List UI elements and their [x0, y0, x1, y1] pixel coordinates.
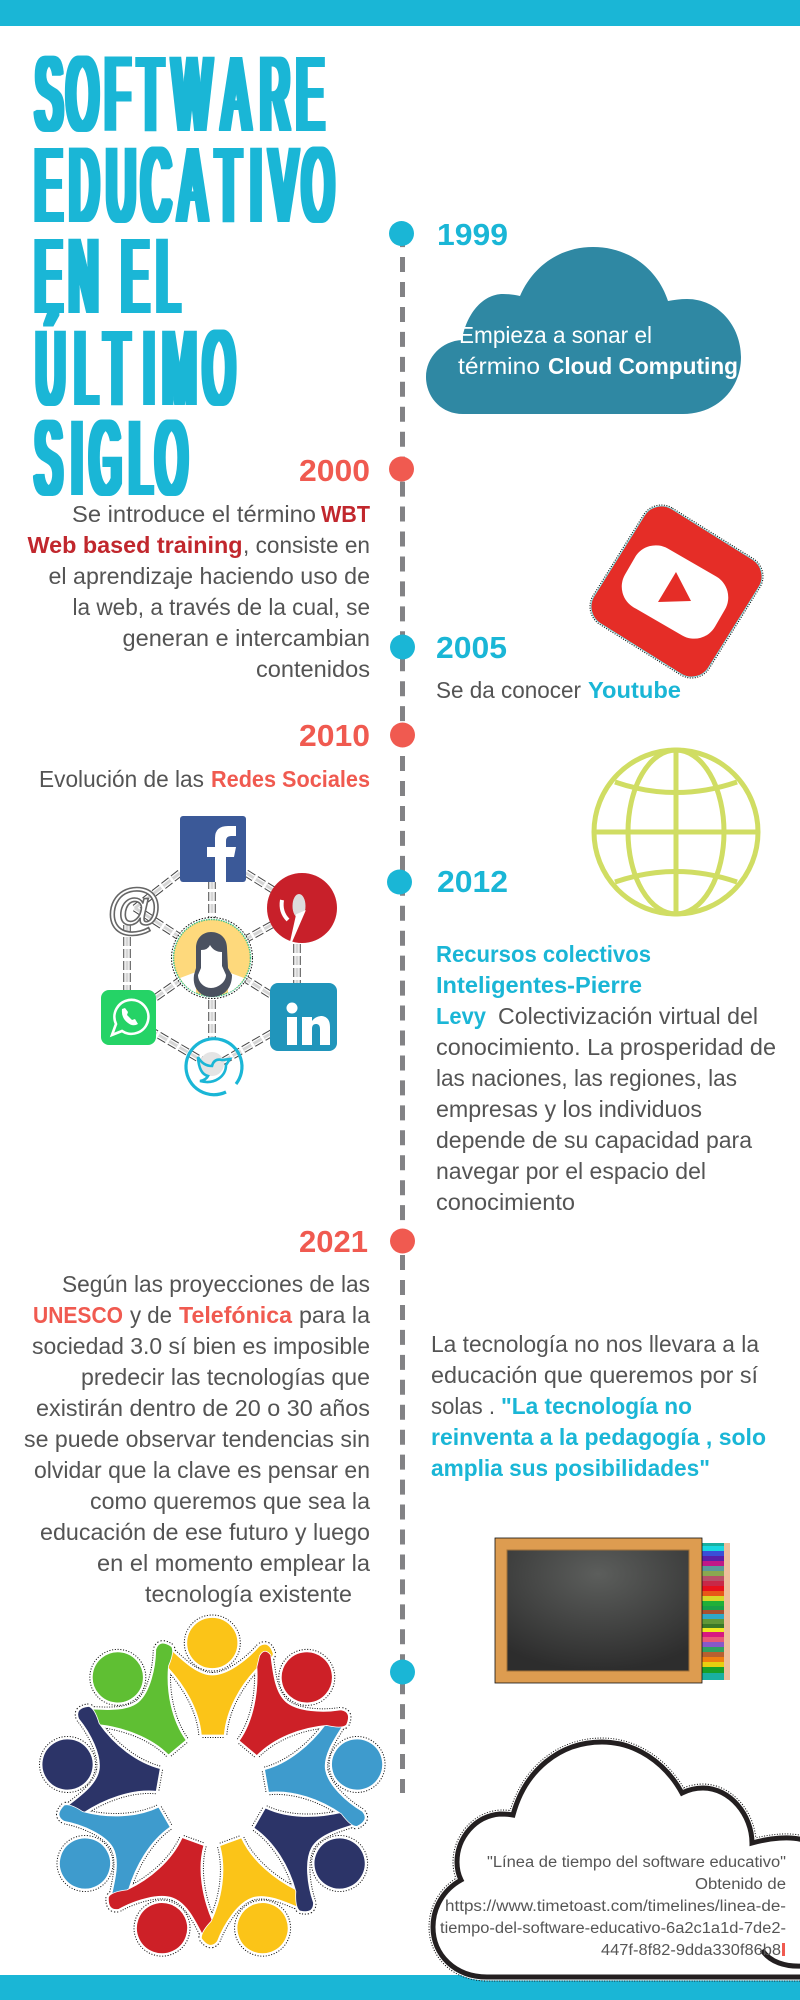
text block 2012: Inteligentes-Pierre [436, 972, 642, 998]
timeline dashed line [400, 232, 405, 1793]
citation text [440, 1854, 786, 1959]
text 2005 [436, 677, 681, 703]
text block 2000: contenidos [256, 656, 370, 682]
text block 2021: Según las proyecciones de las [62, 1271, 370, 1297]
text block 2012: navegar por el espacio del [436, 1158, 706, 1184]
cloud text: Empieza a sonar el [459, 322, 652, 348]
outlined cloud [433, 1742, 800, 1977]
text block 2000: , consiste en [243, 532, 370, 558]
text block 2012: las naciones, las regiones, las [436, 1065, 737, 1091]
quote block: "La tecnología no [501, 1393, 692, 1419]
text block 2021: Telefónica [179, 1302, 292, 1328]
text block 2012: Levy [436, 1003, 486, 1029]
text block 2021: para la [299, 1302, 370, 1328]
title: EDUCATIVO [35, 126, 333, 243]
icon: globe [594, 750, 758, 914]
text block 2012: conocimiento. La prosperidad de [436, 1034, 776, 1060]
text 2010: Evolución de las [39, 766, 204, 792]
quote block [431, 1331, 766, 1481]
title: SOFTWARE [36, 35, 323, 152]
year 2012: 2012 [437, 864, 508, 899]
cloud text: término [458, 353, 540, 379]
text block 2021: tecnología existente [145, 1581, 352, 1607]
timeline dot 2010 [390, 722, 415, 748]
title: ÚLTIMO [36, 309, 235, 426]
icon: youtube [582, 497, 771, 686]
quote block: educación que queremos por sí [431, 1362, 759, 1388]
board frame [495, 1538, 702, 1683]
timeline dot 2021 [390, 1228, 415, 1254]
icon: whatsapp [101, 990, 156, 1045]
figures [32, 1618, 393, 1973]
text block 2012: Colectivización virtual del [498, 1003, 758, 1029]
timeline dot 1999 [389, 221, 414, 246]
citation text: https://www.timetoast.com/timelines/linea-de- [445, 1898, 786, 1915]
team circle illustration [32, 1618, 393, 1973]
top band [0, 0, 800, 26]
title: SIGLO [35, 399, 187, 516]
timeline dot 2000 [389, 456, 414, 482]
text 2010 [39, 766, 370, 792]
timeline dot 2012 [387, 870, 412, 894]
text block 2000: Se introduce el término [72, 501, 316, 527]
citation text: tiempo-del-software-educativo-6a2c1a1d-7de2- [440, 1920, 786, 1937]
icon: linkedin [270, 983, 337, 1051]
citation text: "Línea de tiempo del software educativo" [487, 1854, 786, 1871]
title: EN EL [35, 217, 179, 334]
icon: blackboard with pencils [495, 1538, 730, 1683]
text block 2021 [24, 1271, 370, 1607]
text block 2021: en el momento emplear la [97, 1550, 370, 1576]
text block 2021: existirán dentro de 20 o 30 años [36, 1395, 370, 1421]
cloud text [458, 322, 738, 379]
year 2021: 2021 [299, 1224, 368, 1259]
text block 2021: educación de ese futuro y luego [40, 1519, 370, 1545]
citation text: Obtenido de [695, 1876, 786, 1893]
cloud shape [426, 247, 741, 414]
cloud text: Cloud Computing [548, 353, 738, 379]
board surface [507, 1550, 689, 1671]
year 1999: 1999 [437, 217, 508, 252]
text 2010: Redes Sociales [211, 766, 370, 792]
timeline dot 2005 [390, 634, 415, 660]
text 2005: Se da conocer [436, 677, 581, 703]
text 2005: Youtube [588, 677, 681, 703]
year 2000: 2000 [299, 453, 370, 488]
social network diagram [101, 816, 337, 1095]
outline halo [32, 1618, 393, 1973]
text block 2012: Recursos colectivos [436, 941, 651, 967]
year 2005: 2005 [436, 630, 507, 665]
text block 2021: predecir las tecnologías que [81, 1364, 370, 1390]
icon: central avatar [172, 918, 252, 998]
quote block: solas . [431, 1393, 495, 1419]
text block 2012: empresas y los individuos [436, 1096, 702, 1122]
icon: twitter [186, 1039, 242, 1095]
icon: at sign: @ [106, 877, 163, 940]
text block 2021: sociedad 3.0 sí bien es imposible [32, 1333, 370, 1359]
title [35, 35, 333, 516]
quote block: La tecnología no nos llevara a la [431, 1331, 759, 1357]
network links [127, 873, 303, 1067]
text block 2000: el aprendizaje haciendo uso de [48, 563, 370, 589]
quote block: amplia sus posibilidades" [431, 1455, 710, 1481]
text block 2021: como queremos que sea la [90, 1488, 370, 1514]
text block 2021: olvidar que la clave es pensar en [34, 1457, 370, 1483]
text block 2000: la web, a través de la cual, se [72, 594, 370, 620]
text block 2021: y de [130, 1302, 172, 1328]
bottom band [0, 1975, 800, 2000]
text block 2021: UNESCO [33, 1302, 123, 1328]
text block 2021: se puede observar tendencias sin [24, 1426, 370, 1452]
text block 2000: Web based training [28, 532, 242, 558]
text block 2012: conocimiento [436, 1189, 575, 1215]
cloud panel 1999 [426, 247, 741, 414]
icon: pinterest [267, 873, 337, 943]
icon: facebook [180, 816, 246, 882]
pencils [702, 1543, 730, 1680]
text block 2012: depende de su capacidad para [436, 1127, 752, 1153]
text block 2000 [28, 501, 370, 682]
timeline dot final [390, 1660, 415, 1684]
text block 2000: WBT [321, 501, 370, 527]
quote block: reinventa a la pedagogía , solo [431, 1424, 766, 1450]
text block 2000: generan e intercambian [122, 625, 370, 651]
text block 2012 [436, 941, 776, 1215]
citation text: 447f-8f82-9dda330f86b8 [601, 1942, 781, 1959]
year 2010: 2010 [299, 718, 370, 753]
